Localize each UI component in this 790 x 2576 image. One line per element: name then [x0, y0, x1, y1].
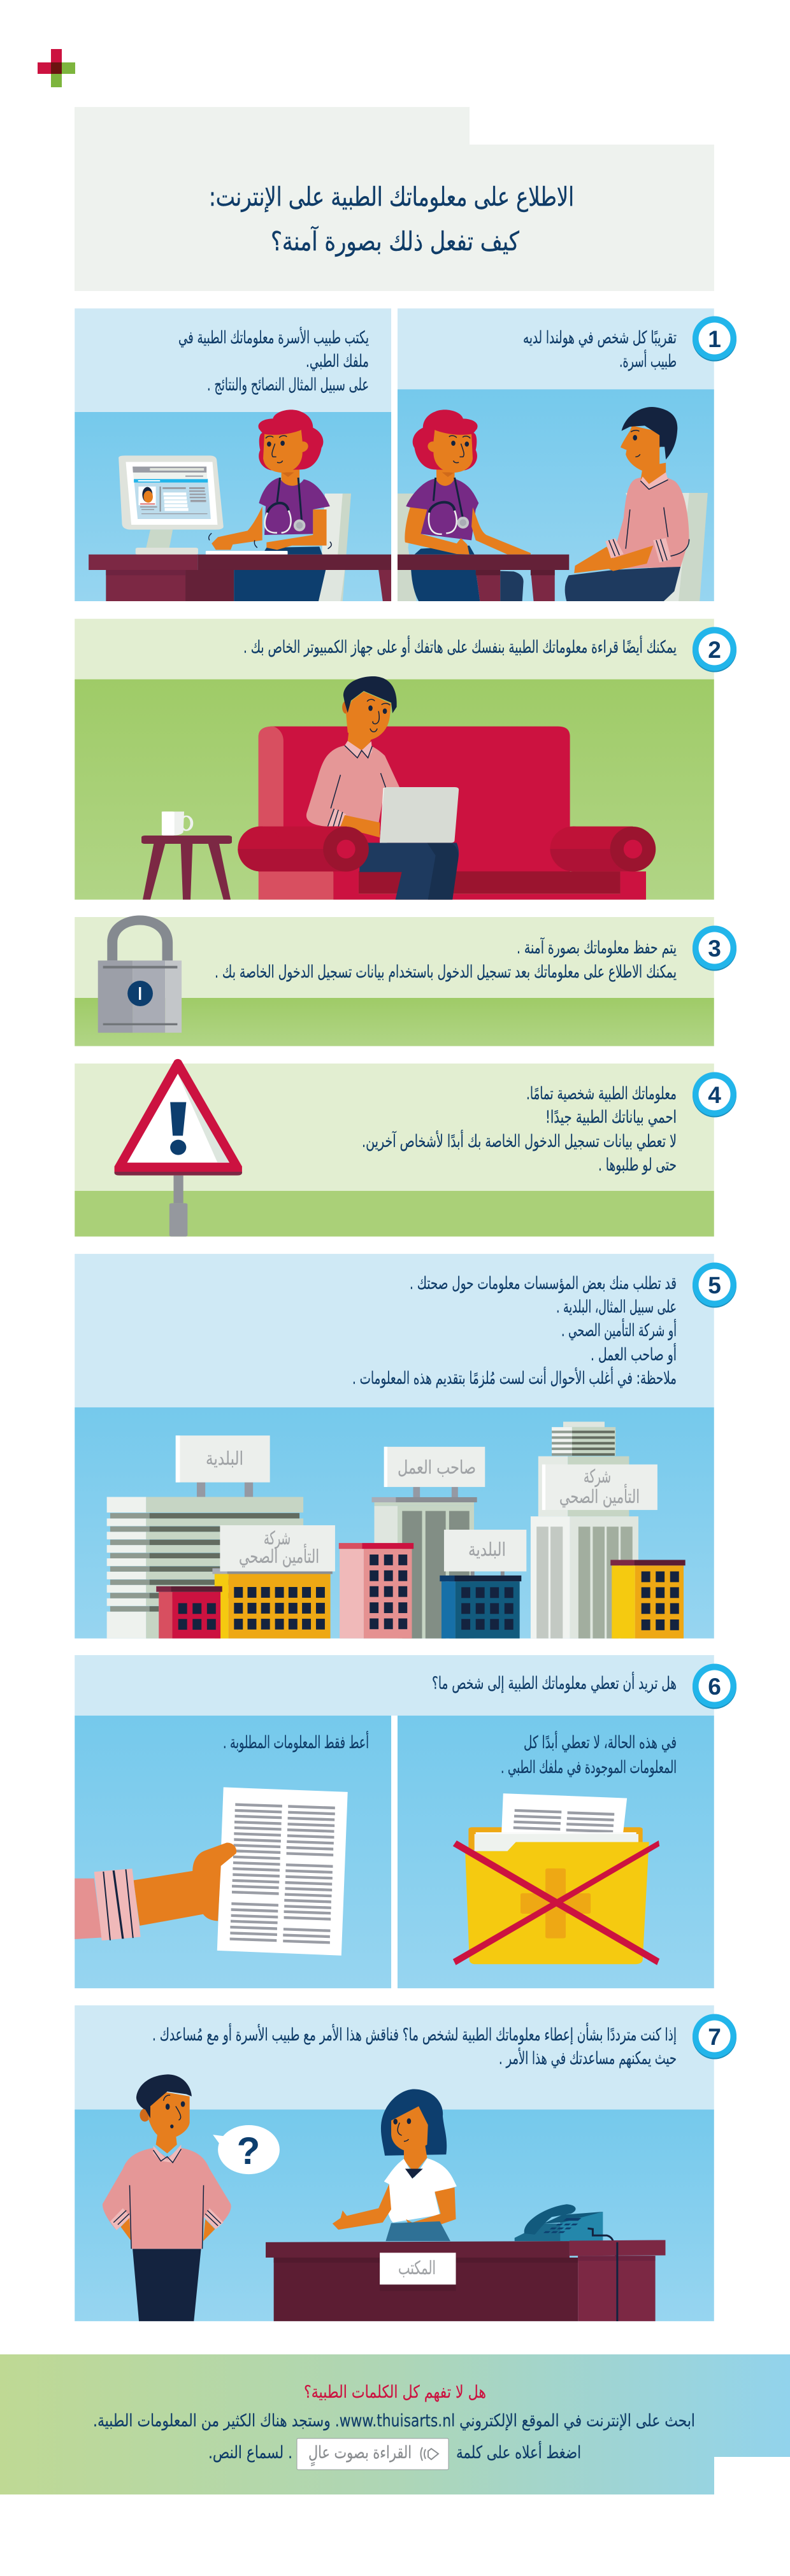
sign labels: البلدية	[206, 1448, 243, 1469]
text: if you are unsure: حيث يمكنهم مساعدتك في هذا الأمر .	[499, 2047, 677, 2068]
title	[209, 181, 574, 257]
scene: doctor at computer	[75, 308, 391, 601]
sign labels: شركة	[584, 1465, 611, 1487]
text: information is personal	[362, 1084, 677, 1175]
sign labels: شركة	[264, 1527, 291, 1549]
footer read aloud line: . لسماع النص.	[208, 2443, 292, 2463]
text: organisations may ask: قد تطلب منك بعض المؤسسات معلومات حول صحتك .	[410, 1274, 677, 1293]
text: give only what is requested: أعط فقط المعلومات المطلوبة .	[223, 1730, 369, 1753]
panel: step 1	[75, 308, 736, 601]
title: كيف تفعل ذلك بصورة آمنة؟	[271, 225, 519, 257]
button: read aloud	[297, 2438, 449, 2470]
badge: 1	[693, 316, 736, 362]
text: information is personal: احمي بياناتك الطبية جيدًا!	[545, 1107, 677, 1127]
text: organisations may ask: على سبيل المثال، البلدية .	[556, 1297, 677, 1317]
badge: 6	[693, 1663, 736, 1709]
text: family doctor writes	[178, 326, 369, 395]
panel: step 7	[75, 2005, 736, 2321]
sign labels: التأمين الصحي	[239, 1543, 319, 1568]
badge: 1: 1	[708, 326, 721, 352]
scene: padlock	[75, 915, 714, 1046]
text: almost everyone has a doctor: تقريبًا كل شخص في هولندا لديه	[523, 328, 677, 348]
text: if you are unsure	[152, 2022, 677, 2068]
text: family doctor writes: يكتب طبيب الأسرة معلوماتك الطبية في	[178, 326, 369, 348]
footer website line: ابحث على الإنترنت في الموقع الإلكتروني www.thuisarts.nl. وستجد هناك الكثير من المعلومات الطبية.	[93, 2411, 695, 2431]
scene: hand with paper and crossed-out folder	[75, 1655, 714, 1988]
text: organisations may ask	[352, 1274, 677, 1388]
text: family doctor writes: على سبيل المثال النصائح والنتائج .	[207, 375, 369, 395]
panel: step 6	[75, 1655, 736, 1988]
badge: 2	[693, 627, 736, 672]
panel: step 4	[75, 1059, 736, 1237]
scene: patient and receptionist at desk	[75, 2005, 714, 2321]
text: almost everyone has a doctor: طبيب أسرة.	[619, 349, 677, 371]
scene: city buildings with signs	[75, 1254, 714, 1639]
title: الاطلاع على معلوماتك الطبية على الإنترنت:	[209, 181, 574, 212]
speech bubble question mark: ?	[237, 2130, 260, 2172]
text: almost everyone has a doctor	[523, 328, 677, 371]
text: information is personal: حتى لو طلبوها .	[598, 1155, 677, 1175]
text: information is personal: معلوماتك الطبية شخصية تمامًا.	[526, 1084, 677, 1104]
badge: 5	[693, 1262, 736, 1308]
panel: step 3	[75, 915, 736, 1046]
text: never give everything: المعلومات الموجودة في ملفك الطبي .	[501, 1758, 677, 1777]
sign labels	[206, 1448, 640, 1568]
badge: 3	[693, 926, 736, 971]
text: stored safely	[215, 937, 677, 982]
sign labels: البلدية	[468, 1539, 506, 1560]
sign labels: صاحب العمل	[398, 1456, 476, 1478]
text: stored safely: يتم حفظ معلوماتك بصورة آمنة .	[517, 937, 677, 958]
badge: 3: 3	[708, 936, 721, 962]
desk sign: المكتب	[398, 2257, 436, 2279]
sign labels: التأمين الصحي	[559, 1483, 640, 1508]
scene: man on sofa with laptop	[75, 619, 714, 900]
text: never give everything: في هذه الحالة، لا تعطي أبدًا كل	[524, 1730, 677, 1753]
button: read aloud: القراءة بصوت عالٍ	[308, 2443, 412, 2466]
footer question: هل لا تفهم كل الكلمات الطبية؟	[304, 2382, 486, 2402]
text: family doctor writes: ملفك الطبي.	[306, 352, 369, 371]
footer read aloud line	[208, 2440, 581, 2463]
badge: 7: 7	[708, 2024, 721, 2050]
badge: 2: 2	[708, 637, 721, 663]
text: organisations may ask: أو شركة التأمين الصحي .	[561, 1318, 677, 1341]
footer read aloud line: اضغط أعلاه على كلمة	[456, 2440, 581, 2463]
badge: 6: 6	[708, 1674, 721, 1700]
text: organisations may ask: أو صاحب العمل .	[591, 1342, 677, 1365]
badge: 7	[693, 2014, 736, 2060]
panel: step 2	[75, 619, 736, 900]
scene: doctor and patient	[398, 308, 714, 601]
panel: step 5	[75, 1254, 736, 1639]
panel: footer	[0, 2354, 790, 2494]
text: sharing information question: هل تريد أن تعطي معلوماتك الطبية إلى شخص ما؟	[432, 1671, 677, 1693]
badge: 4	[693, 1072, 736, 1117]
badge: 5: 5	[708, 1272, 721, 1299]
text: never give everything	[501, 1730, 677, 1777]
scene: warning sign	[75, 1059, 714, 1237]
title panel	[75, 107, 714, 291]
logo: medical cross	[38, 49, 75, 87]
badge: 4: 4	[708, 1082, 721, 1108]
